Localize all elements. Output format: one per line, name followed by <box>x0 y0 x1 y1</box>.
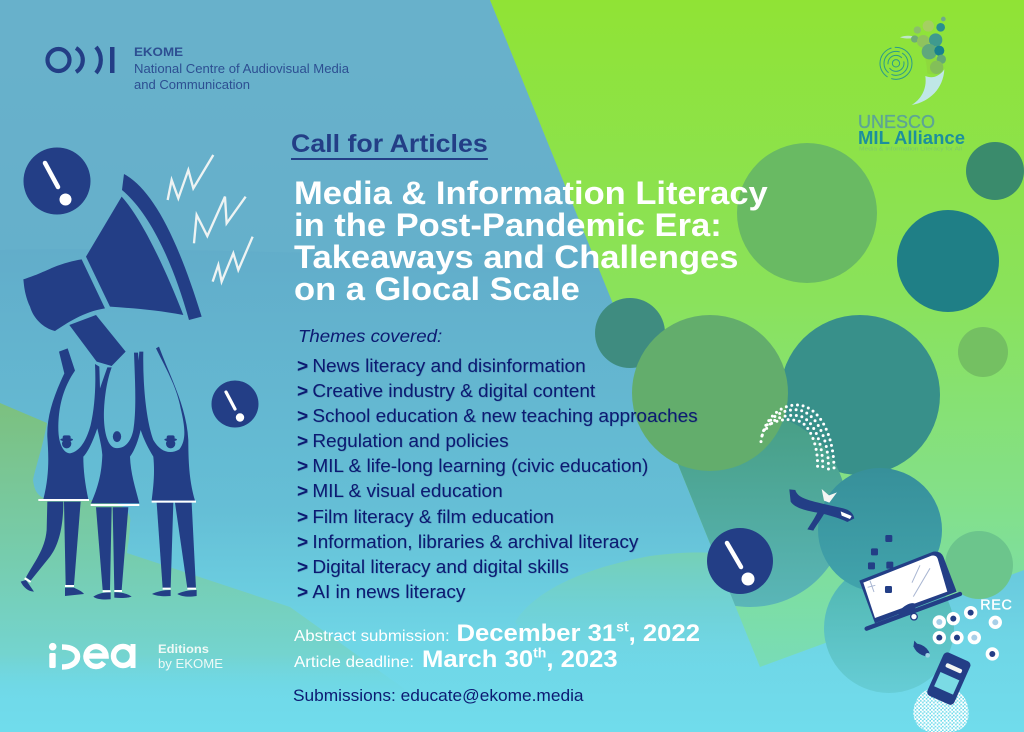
logo: EKOME text <box>134 45 349 92</box>
green hump centre <box>515 552 760 674</box>
theme list: >Digital literacy and digital skills <box>297 557 569 577</box>
theme list: >Information, libraries & archival literacy <box>297 532 638 552</box>
main title: in the Post-Pandemic Era: <box>294 207 722 243</box>
logo: idea Editions: Editions <box>158 642 209 656</box>
theme list: >News literacy and disinformation <box>297 356 586 376</box>
icon: alert badge middle <box>212 380 258 428</box>
logo: idea Editions: by EKOME <box>158 657 223 671</box>
logo: idea Editions <box>49 642 223 671</box>
icon: alert badge top left <box>24 148 90 214</box>
skirt and ankle lines <box>25 500 196 591</box>
figure right legs <box>152 503 197 597</box>
heading: call for articles: Call for Articles <box>291 130 488 158</box>
figure centre legs <box>93 507 132 600</box>
icon: plane <box>789 489 854 531</box>
theme list: >Regulation and policies <box>297 431 509 451</box>
main title: Takeaways and Challenges <box>294 239 738 275</box>
theme list: >Creative industry & digital content <box>297 381 595 401</box>
theme list: >AI in news literacy <box>297 582 465 602</box>
figure left legs <box>21 502 84 596</box>
green hill left <box>0 403 420 700</box>
dotted arc <box>761 405 834 473</box>
logo: UNESCO MIL Alliance: Media & Information Literacy for All <box>859 146 962 152</box>
icon: record dots <box>933 606 1002 661</box>
theme list: >MIL & visual education <box>297 481 503 501</box>
abstract deadline: Abstract submission: December 31st, 2022 <box>294 620 700 647</box>
themes label: Themes covered: <box>298 326 442 346</box>
circles <box>595 142 1024 693</box>
theme list: >MIL & life-long learning (civic education) <box>297 456 648 476</box>
theme list <box>297 356 698 602</box>
logo: ODI <box>48 47 114 73</box>
icon: small fish <box>912 641 932 659</box>
submissions email: Submissions: educate@ekome.media <box>293 687 584 705</box>
megaphone and figure legs <box>21 155 253 600</box>
article deadline: Article deadline: March 30th, 2023 <box>294 646 618 673</box>
icon: alert badge bottom <box>707 528 773 594</box>
logo: EKOME text: and Communication <box>134 78 250 92</box>
main title: Media & Information Literacy <box>294 175 768 211</box>
REC label: REC <box>980 598 1013 614</box>
logo: UNESCO MIL Alliance: UNESCO <box>858 111 935 132</box>
logo: EKOME text: EKOME <box>134 45 183 59</box>
main title: on a Glocal Scale <box>294 271 580 307</box>
icon: pixel squares <box>868 535 893 569</box>
icon: phone <box>926 651 972 706</box>
logo: UNESCO MIL Alliance <box>858 17 965 153</box>
logo: UNESCO MIL Alliance: MIL Alliance <box>858 128 965 148</box>
three figures upper bodies <box>43 347 195 503</box>
digital illustration lower right <box>761 405 1013 732</box>
megaphone <box>23 174 202 366</box>
main title <box>294 175 768 307</box>
dotted semicircle <box>913 686 969 732</box>
logo: EKOME text: National Centre of Audiovisual Media <box>134 62 349 76</box>
theme list: >Film literacy & film education <box>297 507 554 527</box>
theme list: >School education & new teaching approaches <box>297 406 698 426</box>
green wedge <box>490 0 1024 667</box>
icon: laptop <box>859 552 960 629</box>
sound zigzags <box>168 155 253 282</box>
background band <box>0 0 595 254</box>
